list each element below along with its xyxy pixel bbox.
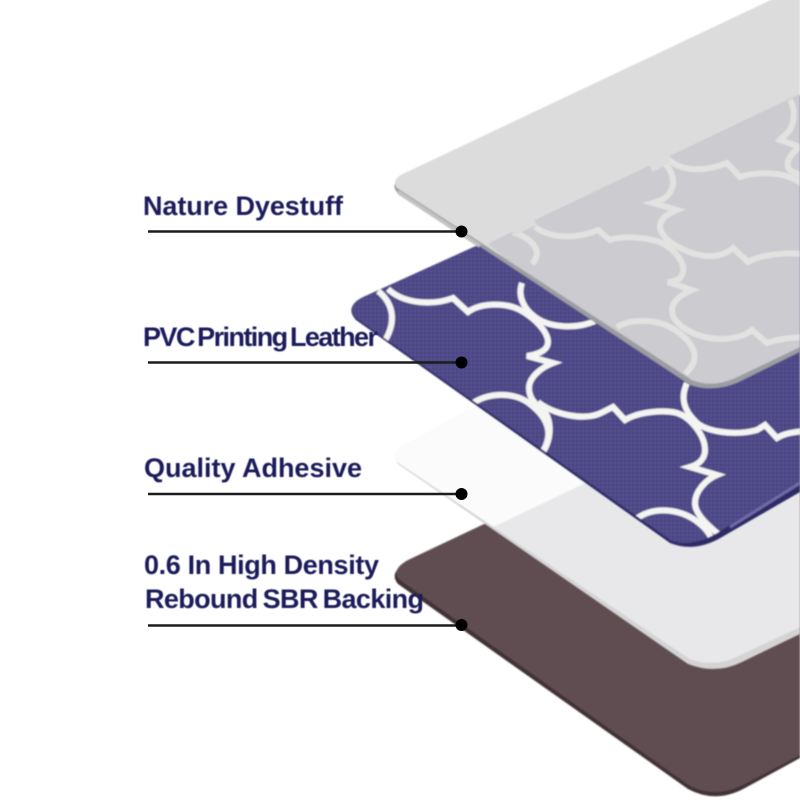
callout: PVC printing leather xyxy=(143,322,468,368)
callout: high density rebound backing: 0.6 In High Density xyxy=(144,550,379,580)
callout: nature dyestuff: Nature Dyestuff xyxy=(143,191,344,221)
callout: high density rebound backing: Rebound SBR Backing xyxy=(145,584,424,614)
callout: quality adhesive xyxy=(144,453,468,500)
layer: purple PVC printing leather xyxy=(351,95,800,547)
layer: grey nature dyestuff sheet xyxy=(394,0,800,400)
callout: nature dyestuff xyxy=(143,191,468,238)
layer: brown SBR backing xyxy=(395,398,800,796)
white trellis pattern xyxy=(378,283,800,545)
callout: quality adhesive: Quality Adhesive xyxy=(144,453,362,483)
translucent pattern cells xyxy=(488,94,800,400)
callout: PVC printing leather: PVC Printing Leather xyxy=(143,322,378,352)
callout: high density rebound backing xyxy=(144,550,468,631)
layer: quality adhesive sheet xyxy=(396,398,800,670)
